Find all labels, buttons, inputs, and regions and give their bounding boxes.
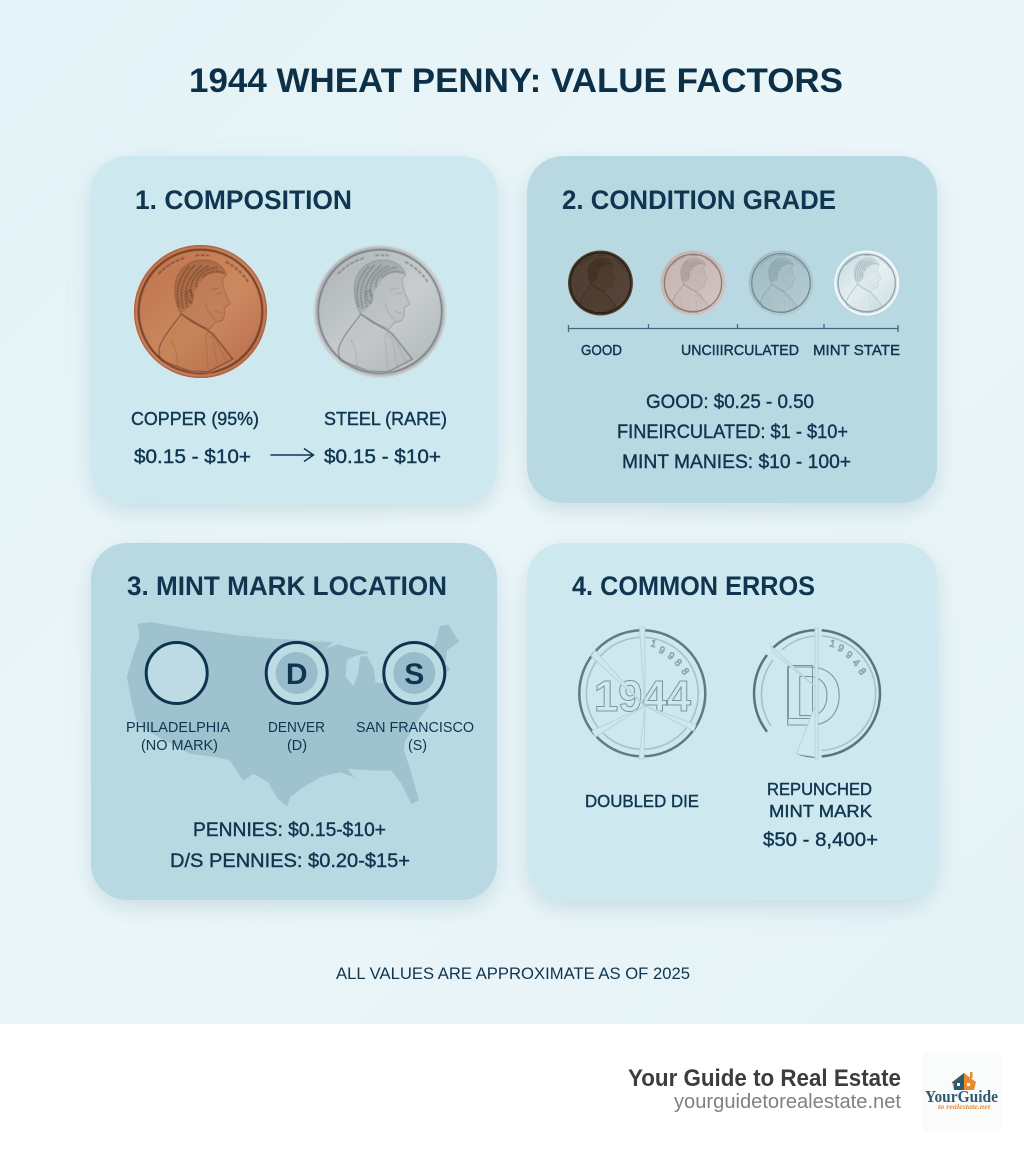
- label: copper: COPPER (95%): [131, 408, 259, 429]
- marker: philadelphia: [146, 642, 207, 704]
- icon: doubled die coin: 1944: [594, 672, 692, 721]
- value: steel: $0.15 - $10+: [324, 446, 441, 468]
- label: good: GOOD: [581, 343, 622, 359]
- marker: san francisco: [384, 642, 445, 704]
- value: fine: FINEIRCULATED: $1 - $10+: [617, 422, 848, 443]
- heading: condition grade: 2. CONDITION GRADE: [562, 185, 836, 215]
- icon: doubled die coin: 8: [679, 666, 691, 678]
- footnote: ALL VALUES ARE APPROXIMATE AS OF 2025: [336, 965, 690, 983]
- heading: mint mark location: 3. MINT MARK LOCATION: [127, 571, 447, 601]
- marker: san francisco: S: [404, 658, 424, 691]
- icon: repunched mint mark coin: 9: [843, 649, 855, 662]
- icon: uncirculated penny: [748, 250, 814, 316]
- icon: copper penny: [134, 245, 267, 378]
- icon: doubled die coin: 8: [672, 657, 684, 669]
- label: no mark: (NO MARK): [141, 738, 218, 754]
- icon: repunched mint mark coin: 4: [850, 657, 862, 669]
- icon: good penny: [568, 250, 633, 316]
- icon: repunched mint mark coin: [754, 628, 880, 759]
- label: doubled die: DOUBLED DIE: [585, 791, 699, 811]
- map: united states: [127, 623, 458, 806]
- label: philadelphia: PHILADELPHIA: [126, 720, 230, 736]
- panel: common errors: [527, 543, 937, 900]
- value: errors: $50 - 8,400+: [763, 829, 878, 851]
- icon: doubled die coin: [579, 627, 705, 759]
- grade scale: [568, 324, 898, 332]
- title: 1944 WHEAT PENNY: VALUE FACTORS: [189, 62, 843, 100]
- icon: repunched mint mark coin: D: [782, 649, 843, 743]
- icon: steel penny: [314, 245, 446, 378]
- label: san francisco: SAN FRANCISCO: [356, 720, 474, 736]
- icon: mint state penny: [834, 250, 899, 316]
- panel: condition grade: [527, 156, 937, 503]
- label: d: (D): [287, 738, 307, 754]
- value: d/s pennies: D/S PENNIES: $0.20-$15+: [170, 851, 410, 872]
- logo: [922, 1052, 1002, 1132]
- footer brand name: Your Guide to Real Estate: [628, 1065, 901, 1092]
- label: s: (S): [408, 738, 427, 754]
- value: good: GOOD: $0.25 - 0.50: [646, 392, 814, 413]
- label: repunched: REPUNCHED: [767, 779, 872, 799]
- icon: repunched mint mark coin: 8: [856, 666, 868, 678]
- label: steel: STEEL (RARE): [324, 408, 447, 429]
- icon: doubled die coin: 1: [649, 638, 658, 650]
- arrow: [270, 448, 314, 462]
- footer url: yourguidetorealestate.net: [674, 1091, 901, 1113]
- label: denver: DENVER: [268, 720, 325, 736]
- label: mint mark: MINT MARK: [769, 801, 872, 821]
- marker: denver: D: [286, 658, 308, 691]
- panel: mint mark location: [91, 543, 497, 900]
- icon: repunched mint mark coin: 9: [836, 643, 846, 655]
- icon: house: [952, 1072, 976, 1090]
- value: pennies: PENNIES: $0.15-$10+: [193, 820, 386, 841]
- logo tagline: to realestate.net: [938, 1102, 991, 1111]
- logo wordmark: YourGuide: [925, 1087, 998, 1106]
- value: copper: $0.15 - $10+: [134, 446, 251, 468]
- icon: doubled die coin: 9: [657, 645, 667, 657]
- label: mint state: MINT STATE: [813, 343, 900, 359]
- marker: denver: [266, 642, 327, 704]
- value: mint: MINT MANIES: $10 - 100+: [622, 452, 851, 473]
- icon: doubled die coin: 9: [665, 650, 677, 663]
- icon: fine penny: [660, 250, 726, 316]
- footer: [0, 1024, 1024, 1154]
- label: uncirculated: UNCIIIRCULATED: [681, 343, 799, 359]
- heading: common errors: 4. COMMON ERROS: [572, 571, 815, 601]
- panel: composition: [91, 156, 497, 503]
- heading: composition: 1. COMPOSITION: [135, 185, 352, 215]
- icon: repunched mint mark coin: 1: [828, 638, 837, 650]
